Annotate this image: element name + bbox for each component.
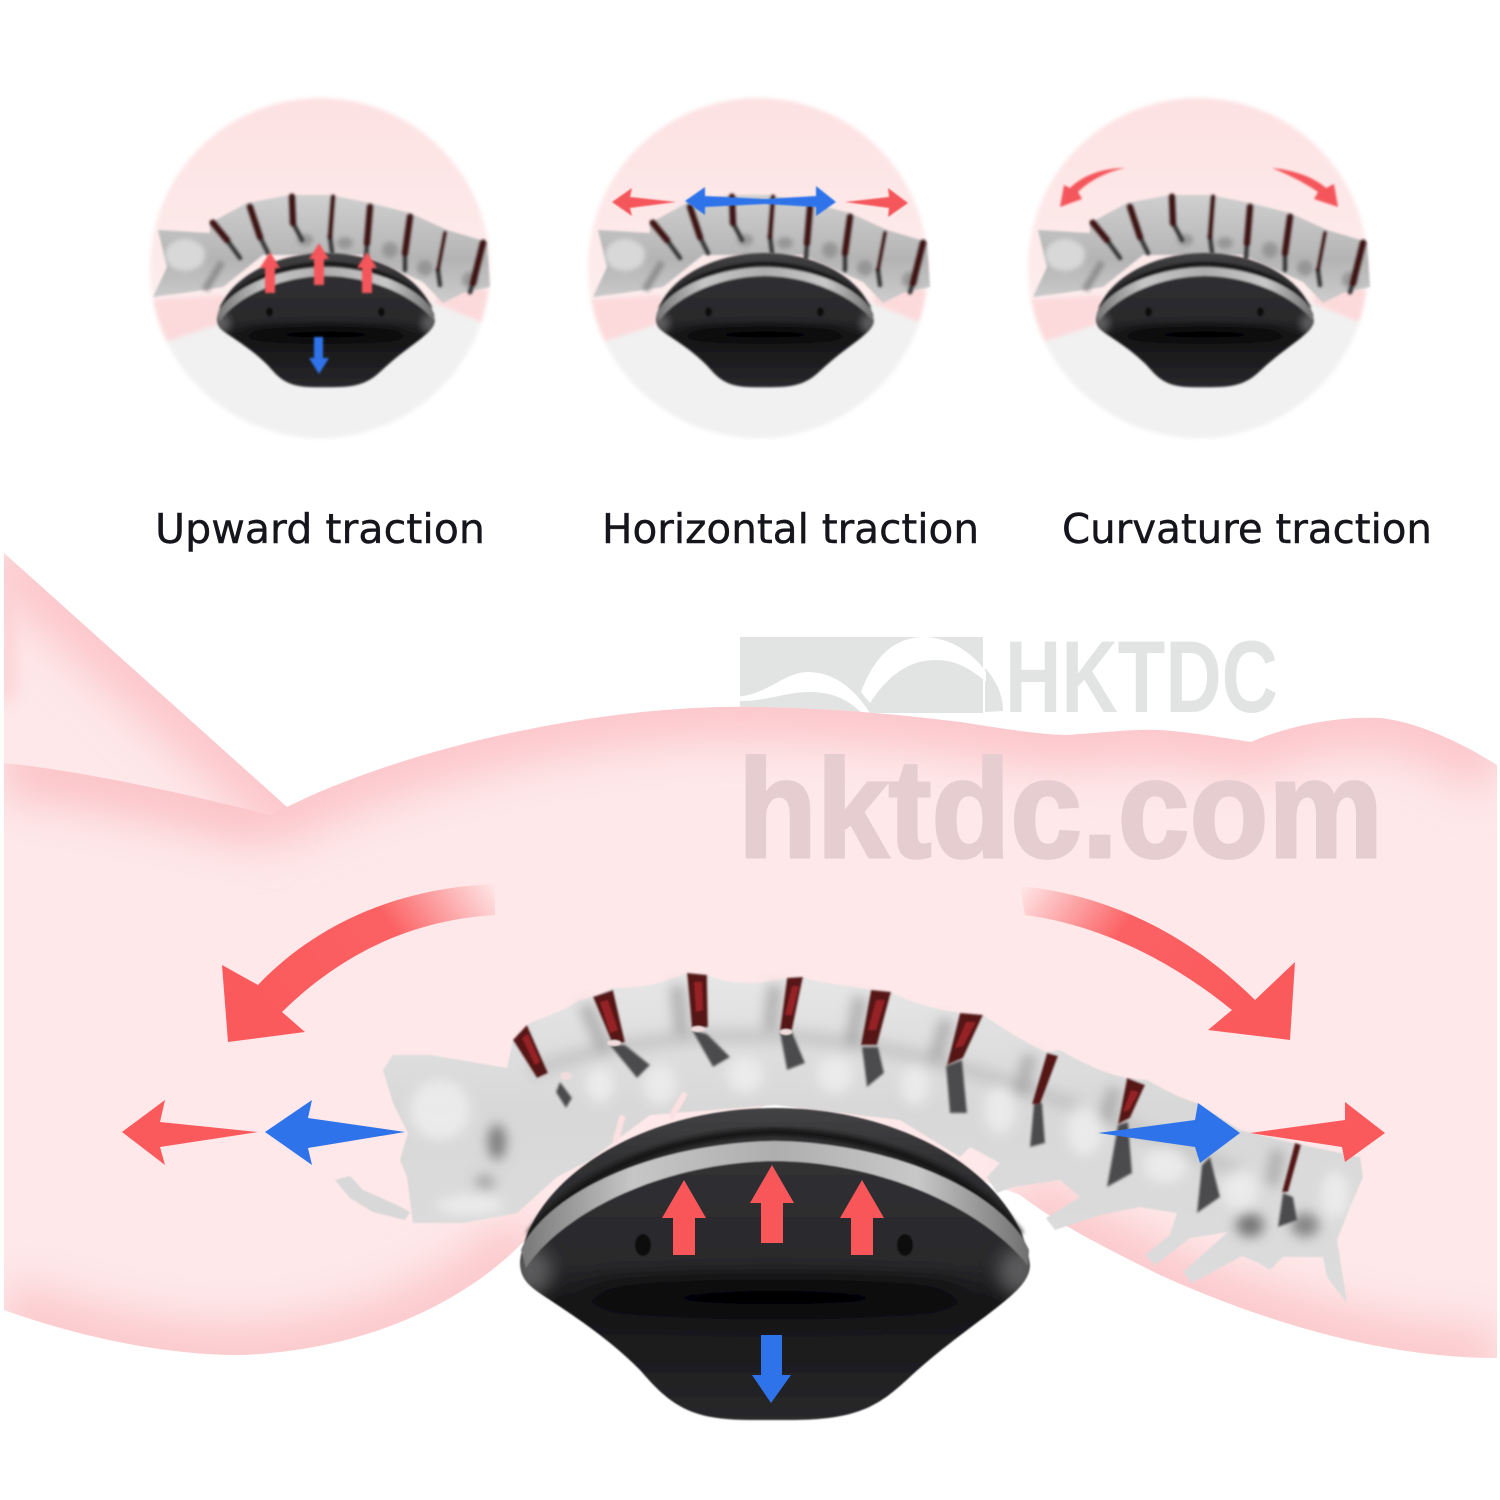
watermark: HKTDC logo <box>718 620 1278 734</box>
spine: grey shadows below discs <box>556 1030 1297 1227</box>
spine: upward <box>153 195 490 303</box>
arrow: red right outward <box>1250 1102 1385 1162</box>
label: upward traction: Upward traction <box>155 505 485 553</box>
spine: pink gaps <box>616 1095 684 1140</box>
arrow: large device downward <box>752 1335 791 1403</box>
arrows: upward red <box>260 243 377 293</box>
spine: red discs <box>513 973 1301 1192</box>
label: horizontal traction: Horizontal traction <box>602 505 979 553</box>
device: large <box>508 1108 1042 1420</box>
panel: upward traction <box>150 98 490 438</box>
circle backdrop: horizontal <box>588 98 928 438</box>
watermark: hktdc.com: hktdc.com <box>738 730 1383 887</box>
device: upward <box>212 253 440 387</box>
device: horizontal <box>651 253 879 387</box>
arrow: blue right <box>1098 1103 1240 1163</box>
label: curvature traction: Curvature traction <box>1062 505 1432 553</box>
panel: curvature traction <box>1028 98 1370 438</box>
device: curvature <box>1091 253 1319 387</box>
watermark: HKTDC text: HKTDC <box>1005 620 1278 734</box>
spine: large <box>335 973 1363 1303</box>
back silhouette <box>4 553 1497 1358</box>
arrows: curvature <box>1060 168 1338 207</box>
circle backdrop: curvature <box>1028 98 1368 438</box>
arrow: curved red left <box>222 884 495 1042</box>
arrows: large device upward <box>662 1165 884 1255</box>
spine: soft shading <box>410 985 1349 1237</box>
panel: horizontal traction <box>588 98 930 438</box>
arrow: downward blue <box>309 337 329 374</box>
arrow: curved red right <box>1020 886 1295 1040</box>
arrows: horizontal <box>612 186 908 217</box>
spine: curvature <box>1033 195 1370 303</box>
arrow: red left outward <box>122 1100 258 1165</box>
spine: horizontal <box>593 195 930 303</box>
circle backdrop: upward <box>150 98 490 438</box>
arrow: blue left inward <box>265 1100 405 1165</box>
